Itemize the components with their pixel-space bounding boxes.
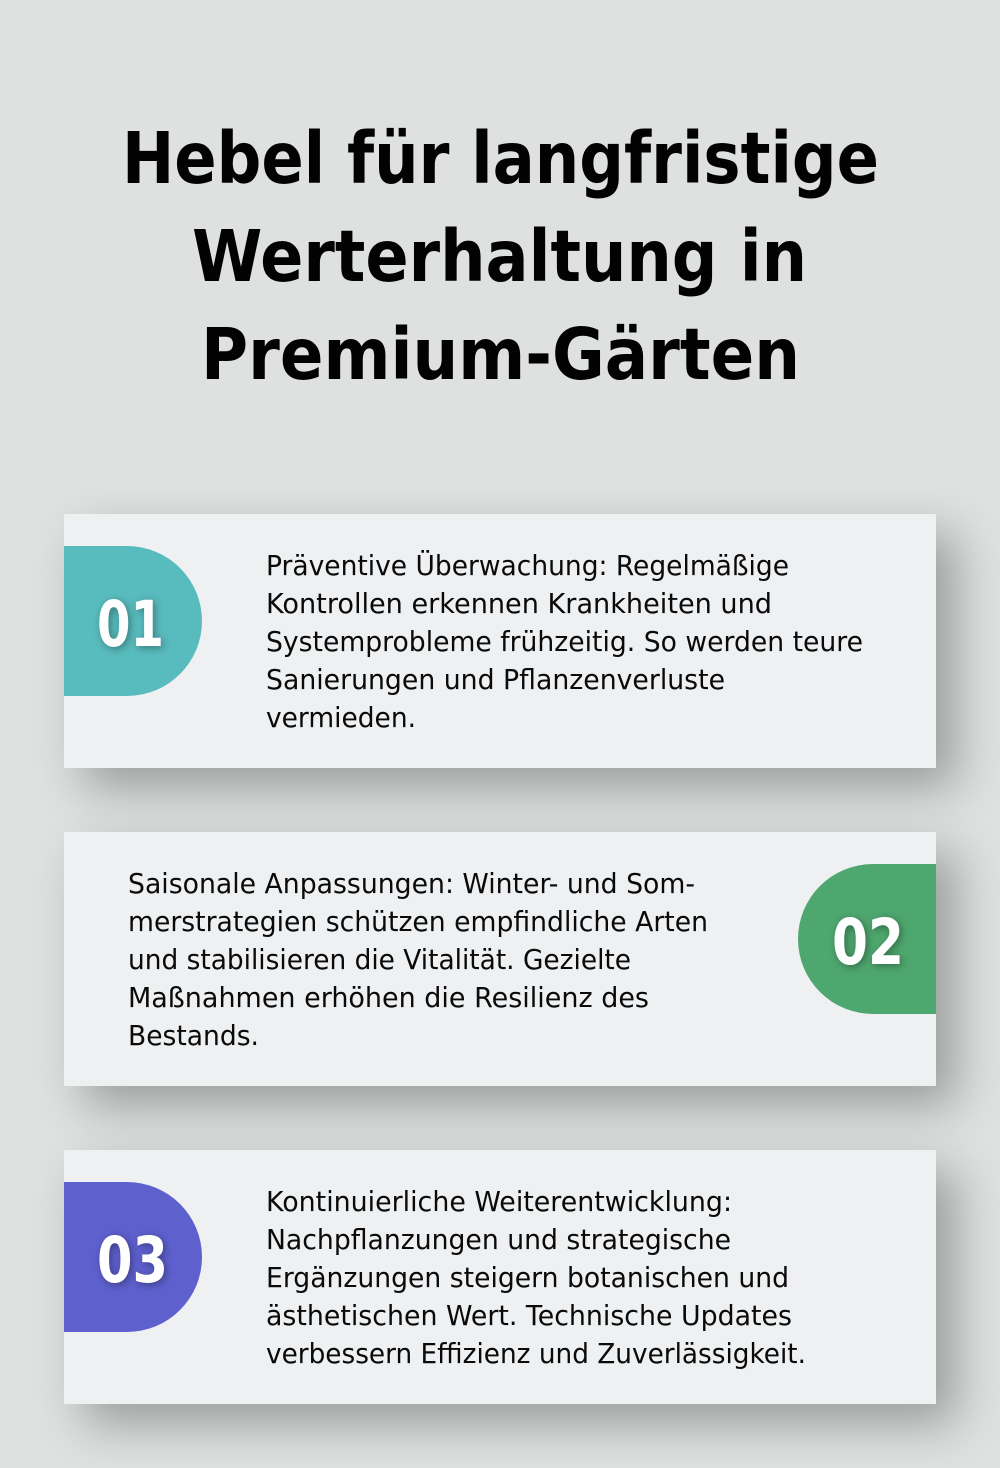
text: step 01 description: Präventive Überwachung: Regelmäßige xyxy=(266,550,788,582)
text: step 01 description xyxy=(266,550,862,734)
title xyxy=(122,117,879,396)
badge: 02: 02 xyxy=(832,906,904,979)
text: step 03 description: ästhetischen Wert. Technische Updates xyxy=(266,1301,792,1332)
text: step 01 description: Sanierungen und Pflanzenverluste xyxy=(266,665,724,696)
text: step 03 description: Nachpflanzungen und strategische xyxy=(266,1225,730,1256)
text: step 02 description: merstrategien schützen empfindliche Arten xyxy=(128,907,708,938)
text: step 02 description xyxy=(128,869,708,1052)
text: step 02 description: Bestands. xyxy=(128,1021,259,1052)
text: step 03 description xyxy=(266,1187,806,1370)
badge: 01 xyxy=(64,546,202,696)
text: step 03 description: Kontinuierliche Weiterentwicklung: xyxy=(266,1187,732,1218)
text: step 02 description: Maßnahmen erhöhen die Resilienz des xyxy=(128,983,649,1014)
panel: step 01 xyxy=(64,514,936,768)
text: step 02 description: Saisonale Anpassungen: Winter- und Som- xyxy=(128,869,695,900)
title: Werterhaltung in xyxy=(192,215,807,298)
badge: 03 xyxy=(64,1182,202,1332)
badge: 02 xyxy=(798,864,936,1014)
badge: 01: 01 xyxy=(97,588,164,661)
text: step 03 description: Ergänzungen steigern botanischen und xyxy=(266,1263,788,1294)
text: step 02 description: und stabilisieren die Vitalität. Gezielte xyxy=(128,945,631,976)
title: Premium-Gärten xyxy=(201,313,800,396)
text: step 01 description: Kontrollen erkennen Krankheiten und xyxy=(266,589,772,620)
badge: 03: 03 xyxy=(97,1224,168,1297)
text: step 01 description: Systemprobleme frühzeitig. So werden teure xyxy=(266,627,862,658)
text: step 03 description: verbessern Effizienz und Zuverlässigkeit. xyxy=(266,1339,806,1370)
title: Hebel für langfristige xyxy=(122,117,879,200)
panel: step 03 xyxy=(64,1150,936,1404)
panel: step 02 xyxy=(64,832,936,1086)
text: step 01 description: vermieden. xyxy=(266,703,416,734)
